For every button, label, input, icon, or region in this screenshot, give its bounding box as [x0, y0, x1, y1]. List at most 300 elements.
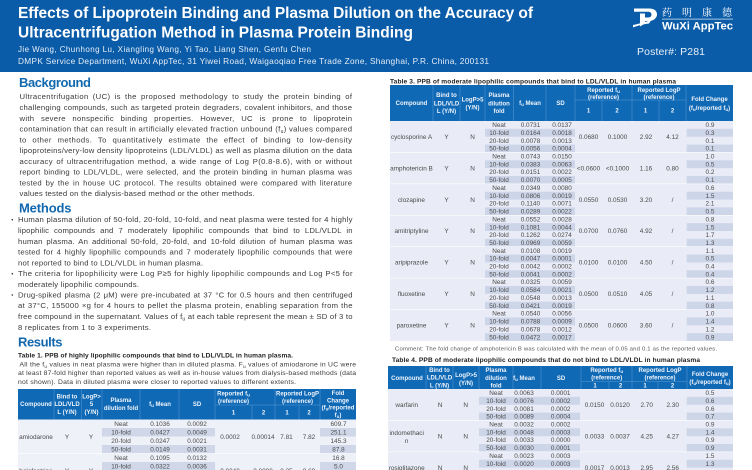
row group: aripiprazole: 0.0108	[521, 248, 541, 255]
row group: amphotericin B: amphotericin B	[390, 165, 433, 172]
row group: amitriptyline: /	[672, 228, 674, 235]
row group: warfarin: 10-fold	[486, 398, 506, 405]
row group: indomethacin: n	[405, 438, 409, 445]
table 4 title: Table 4. PPB of moderate lipophilic compounds that do not bind to LDL/VLDL in human plasma	[392, 357, 700, 364]
table 1 header: 1	[285, 411, 289, 417]
row group: rosiglitazone: 0.0023	[514, 453, 534, 460]
table 1 description: values in neat plasma were higher than in diluted plasma. F	[47, 362, 243, 368]
row group: amiodarone: 0.1036	[150, 421, 170, 428]
table 3 header: dilution	[488, 102, 510, 108]
table 1 header: 2	[262, 411, 266, 417]
row group: aripiprazole: 0.4	[706, 264, 715, 271]
table 3 header: 2	[615, 109, 619, 115]
row group: warfarin: 0.0150	[585, 402, 605, 409]
row group: halofantrine: Neat	[114, 455, 128, 462]
table 1 header: (reference)	[282, 399, 313, 405]
row group: indomethacin: 0.0030	[514, 445, 534, 452]
row group: indomethacin: 10-fold	[486, 429, 506, 436]
row group: fluoxetine: 0.6	[706, 279, 715, 286]
row group: clozapine: 20-fold	[489, 201, 509, 208]
table 1 header: 5	[90, 402, 94, 408]
row group: warfarin: 50-fold	[486, 414, 506, 421]
background paragraph: contamination that can result in artificially elevated fraction unbound (f	[20, 124, 280, 134]
row group: paroxetine: Y	[444, 322, 449, 329]
row group: cyclosporine A: 0.0137	[552, 122, 572, 129]
row group: amitriptyline: 10-fold	[489, 224, 509, 231]
icon: WuXi AppTec logo	[633, 4, 733, 32]
table 3	[390, 85, 733, 341]
row group: fluoxetine: fluoxetine	[398, 291, 426, 298]
row group: clozapine: 0.0080	[552, 185, 572, 192]
row group: amiodarone: Y	[65, 434, 70, 441]
row group: cyclosporine A: 0.1	[706, 146, 715, 153]
row group: fluoxetine: 0.8	[706, 303, 715, 310]
table 1 description: values of amiodarone in UC were	[246, 362, 356, 368]
row group: warfarin: 0.0089	[514, 414, 534, 421]
row group: warfarin: 0.0001	[551, 390, 571, 397]
table 4 header: LogP>5	[455, 373, 478, 379]
row group: aripiprazole: 0.0042	[521, 264, 541, 271]
table 1 header: LogP>	[82, 394, 101, 400]
row group: amphotericin B: 0.0383	[521, 161, 541, 168]
table 1 header: /reported	[328, 406, 355, 412]
table 4 header: dilution	[485, 376, 507, 382]
table 3 header: LogP>5	[462, 98, 484, 104]
row group: clozapine: N	[470, 197, 475, 204]
row group: cyclosporine A: 0.9	[706, 122, 715, 129]
row group: fluoxetine: 10-fold	[489, 287, 509, 294]
table 1 header: SD	[193, 402, 202, 408]
row group: halofantrine: 0.0132	[187, 455, 207, 462]
row group: clozapine	[390, 184, 733, 216]
row group: paroxetine: 0.0056	[552, 311, 572, 318]
row group: warfarin: 0.6	[706, 398, 715, 405]
row group: amiodarone: 7.81	[280, 434, 293, 441]
row group: amitriptyline: N	[470, 228, 475, 235]
table 3 header: (reference)	[643, 95, 675, 101]
row group: warfarin: 0.6	[706, 406, 715, 413]
row group: indomethacin: 0.0032	[514, 422, 534, 429]
row group: indomethacin: 0.0033	[585, 433, 605, 440]
poster number: Poster#: P281	[637, 46, 705, 58]
row group: cyclosporine A: 4.12	[666, 134, 679, 141]
row group: paroxetine: paroxetine	[397, 322, 427, 329]
row group: indomethacin: N	[438, 433, 443, 440]
table 4 header: L (Y/N)	[430, 384, 449, 390]
row group: amiodarone: 50-fold	[111, 446, 131, 454]
authors: Jie Wang, Chunhong Lu, Xiangling Wang, Yi Tao, Liang Shen, Genfu Chen	[18, 45, 311, 54]
table 1 header: u	[326, 407, 329, 412]
table 4 header: Bind to	[429, 368, 450, 374]
table 4 header: Reported f	[590, 368, 620, 374]
row group: amphotericin B: 20-fold	[489, 169, 509, 176]
table 1 header: (reference)	[218, 399, 249, 405]
row group: amphotericin B: 0.0005	[552, 177, 572, 184]
row group: warfarin: 0.0081	[514, 406, 534, 413]
row group: amitriptyline: 0.1081	[521, 224, 541, 231]
row group: paroxetine: 0.9	[706, 334, 715, 341]
row group: cyclosporine A: Neat	[492, 122, 506, 129]
row group: amitriptyline: 4.92	[640, 228, 653, 235]
table 4 header: )	[729, 380, 731, 386]
row group: paroxetine: 0.0600	[608, 322, 628, 329]
row group: indomethacin: 0.0048	[514, 429, 534, 436]
table 1 header: u	[247, 393, 250, 398]
row group: amitriptyline: 20-fold	[489, 232, 509, 239]
table 1 header: Fold	[332, 391, 345, 397]
affiliation: DMPK Service Department, WuXi AppTec, 31 Yiwei Road, Waigaoqiao Free Trade Zone, Shanghai, P.R. China, 200131	[18, 56, 489, 66]
row group: amitriptyline: 1.7	[706, 232, 715, 239]
row group: indomethacin: 0.0033	[514, 437, 534, 444]
row group: clozapine: 0.0019	[552, 193, 572, 200]
row group: paroxetine: 0.0012	[552, 326, 572, 333]
row group: indomethacin: 4.25	[640, 433, 653, 440]
table 3 header: 1	[587, 109, 591, 115]
table 3 header: /reported f	[696, 106, 726, 112]
table 1 header: f	[149, 402, 151, 408]
table 4 header: u	[515, 377, 518, 382]
row group: paroxetine: 0.0788	[521, 319, 541, 326]
row group: indomethacin: 0.0037	[610, 433, 630, 440]
table 3 header: u	[725, 107, 728, 112]
methods bullet list: 8 replicates from 1 to 3 experiments.	[18, 323, 151, 332]
table 3 header: L (Y/N)	[437, 109, 456, 115]
row group: clozapine: 0.0349	[521, 185, 541, 192]
row group: paroxetine: 20-fold	[489, 326, 509, 333]
row group: clozapine: 1.5	[706, 193, 715, 200]
row group: cyclosporine A: 2.92	[640, 134, 653, 141]
row group: aripiprazole	[390, 246, 733, 278]
row group: fluoxetine	[390, 278, 733, 310]
table 3 header: u	[617, 89, 620, 94]
row group: amphotericin B: Neat	[492, 154, 506, 161]
row group: paroxetine: 0.0017	[552, 334, 572, 341]
row group: cyclosporine A: 0.0164	[521, 130, 541, 137]
methods bullet list: u	[182, 317, 185, 323]
table 3 header: (f	[689, 106, 693, 112]
table 3 header: fold	[494, 109, 505, 115]
table 4 header: fold	[490, 384, 502, 390]
background paragraph: with severe nonspecific binding properties. However, UC is prone to lipoprotein	[18, 114, 352, 123]
row group: amitriptyline: 0.0028	[552, 216, 572, 223]
row group: fluoxetine: Neat	[492, 279, 506, 286]
row group: aripiprazole: 0.0100	[608, 260, 628, 267]
row group: amitriptyline: Neat	[492, 216, 506, 223]
background paragraph: to other methods. To quantitatively estimate the effect of binding to low-density	[20, 135, 352, 144]
row group: paroxetine: 0.0009	[552, 319, 572, 326]
row group: aripiprazole: 50-fold	[489, 271, 509, 278]
row group: cyclosporine A: Y	[444, 134, 449, 141]
poster title	[18, 5, 534, 42]
row group: amitriptyline: 1.5	[706, 224, 715, 231]
row group: cyclosporine A: 0.1000	[608, 134, 628, 141]
methods bullet list: moderately lipophilic compounds.	[18, 280, 139, 289]
table 3 header: u	[521, 102, 524, 107]
row group: clozapine: 0.0071	[552, 201, 572, 208]
row group: aripiprazole: 0.0019	[552, 248, 572, 255]
methods bullet list: tested for 4 highly lipophilic compounds and 7 moderately lipophilic compounds that were	[18, 248, 352, 256]
table 1 header: 2	[307, 411, 311, 417]
row group: amiodarone: 0.0092	[187, 421, 207, 428]
row group: amphotericin B: 10-fold	[489, 161, 509, 168]
row group: amphotericin B: <0.0600	[577, 165, 601, 172]
row group: halofantrine	[18, 453, 356, 470]
table 4 header: Compound	[391, 376, 423, 382]
row group: halofantrine: 0.1095	[150, 455, 170, 462]
row group: paroxetine: 50-fold	[489, 334, 509, 341]
row group: cyclosporine A: 10-fold	[489, 130, 509, 137]
table 4 header: Mean	[518, 376, 535, 382]
row group: paroxetine: N	[470, 322, 475, 329]
table 1 header: Bind to	[57, 394, 78, 400]
row group: amitriptyline: 0.0760	[608, 228, 628, 235]
row group: clozapine: /	[672, 197, 674, 204]
row group: warfarin: 0.0002	[551, 398, 571, 405]
row group: clozapine: Neat	[492, 185, 506, 192]
row group: warfarin: 2.70	[640, 402, 653, 409]
row group: indomethacin: 0.9	[706, 445, 715, 452]
background paragraph: lipoproteins/very-low density lipoproteins (LDL/VLDL) as well as plasma dilution on the data	[20, 146, 353, 155]
methods bullet list: free compound in the supernatant. Values of f	[18, 312, 182, 321]
methods bullet list: not reported to bind to LDL/VLDL in human plasma.	[18, 258, 203, 268]
row group: warfarin: 0.0002	[551, 406, 571, 413]
row group: aripiprazole: 0.0100	[579, 260, 599, 267]
row group: amphotericin B: 0.0063	[552, 161, 572, 168]
row group: paroxetine	[390, 309, 733, 341]
table 1 header: L (Y/N)	[57, 410, 77, 416]
methods bullet list: at each table represent the mean ± SD of 3 to	[185, 312, 352, 321]
row group: amphotericin B: 50-fold	[489, 177, 509, 184]
table 1 description	[18, 362, 356, 386]
row group: fluoxetine: 1.1	[706, 295, 715, 302]
row group: amitriptyline: 1.3	[706, 240, 715, 247]
row group: cyclosporine A: 0.0013	[552, 138, 572, 145]
row group: rosiglitazone: Neat	[489, 453, 503, 460]
table 4 header: LDL/VLD	[427, 376, 453, 382]
table 4 header: 1	[593, 384, 597, 390]
row group: clozapine: 3.20	[640, 197, 653, 204]
background paragraph: Ultracentrifugation (UC) is the proposed methodology to study the protein binding of	[20, 92, 353, 101]
row group: cyclosporine A: 0.1	[706, 138, 715, 145]
row group: amitriptyline: 0.0969	[521, 240, 541, 247]
row group: rosiglitazone: 0.0003	[551, 461, 571, 468]
table 4 header: u	[693, 381, 696, 386]
row group: aripiprazole: 0.0047	[521, 256, 541, 263]
row group: indomethacin: 0.0001	[551, 445, 571, 452]
table 4	[388, 366, 733, 470]
row group: indomethacin: 0.0000	[551, 437, 571, 444]
row group: warfarin: N	[463, 402, 468, 409]
row group: paroxetine: 0.0500	[579, 322, 599, 329]
row group: fluoxetine: 0.0021	[552, 287, 572, 294]
row group: aripiprazole: Y	[444, 260, 449, 267]
row group: fluoxetine: 0.0510	[608, 291, 628, 298]
row group: paroxetine: Neat	[492, 311, 506, 318]
row group: aripiprazole: /	[672, 260, 674, 267]
table 3 header: 2	[671, 109, 675, 115]
table 3 header: Reported f	[587, 88, 617, 94]
row group: fluoxetine: 0.0421	[521, 303, 541, 310]
row group: clozapine: 0.6	[706, 185, 715, 192]
row group: fluoxetine: 0.0013	[552, 295, 572, 302]
row group: clozapine: 50-fold	[489, 209, 509, 216]
row group: indomethacin: indomethaci	[389, 430, 424, 437]
row group: paroxetine: 3.60	[640, 322, 653, 329]
table 1 header: (Y/N)	[84, 410, 98, 416]
table 3 header: (reference)	[588, 95, 619, 101]
table 1 header: Change	[327, 399, 350, 405]
table 1 header: u	[151, 403, 154, 408]
table 3 header	[390, 85, 733, 121]
row group: amiodarone: 145.3	[330, 438, 347, 445]
row group: indomethacin: 4.27	[666, 433, 679, 440]
table 3 header: (Y/N)	[466, 106, 480, 112]
row group: warfarin: Neat	[489, 390, 503, 397]
icon: WuXi AppTec logo: 药	[662, 4, 672, 19]
row group: fluoxetine: 20-fold	[489, 295, 509, 302]
row group: rosiglitazone: 1.5	[706, 453, 715, 460]
row group: warfarin: 0.0063	[514, 390, 534, 397]
table 4 header	[388, 366, 733, 390]
row group: amphotericin B: 0.0151	[521, 169, 541, 176]
row group: amiodarone: 0.0247	[150, 438, 170, 445]
background paragraph: ) values compared	[284, 124, 352, 134]
table 3 header: u	[693, 107, 696, 112]
row group: fluoxetine: 4.05	[640, 291, 653, 298]
table 1 header: Reported f	[217, 392, 247, 398]
icon: WuXi AppTec logo: 康	[702, 4, 712, 19]
row group: clozapine: 0.0550	[579, 197, 599, 204]
row group: fluoxetine: 0.0019	[552, 303, 572, 310]
row group: warfarin: 0.0004	[551, 414, 571, 421]
table 1 header	[18, 389, 356, 420]
row group: amiodarone	[19, 421, 356, 454]
table 4 header: (reference)	[591, 375, 622, 381]
table 3 comment: Comment: The fold change of amphotericin B was calculated with the mean of 0.05 and 0.1 as the reported values.	[395, 346, 717, 352]
row group: warfarin: warfarin	[394, 402, 419, 409]
table 3 header: LDL/VLD	[434, 102, 460, 108]
table 3 header: 1	[644, 109, 648, 115]
header banner	[0, 0, 752, 72]
row group: amiodarone: 0.0021	[187, 438, 207, 445]
row group: aripiprazole: N	[470, 260, 475, 267]
methods bullet list	[12, 215, 353, 332]
methods bullet list: Human plasma dilution of 50-fold, 20-fold, 10-fold, and neat plasma were tested for 4 highly	[18, 215, 353, 224]
row group: cyclosporine A: 0.0078	[521, 138, 541, 145]
table 3 header: Fold Change	[691, 97, 728, 103]
row group: rosiglitazone	[388, 452, 733, 470]
background paragraph	[18, 92, 353, 198]
row group: aripiprazole: 0.5	[706, 256, 715, 263]
table 1 header: f	[335, 413, 337, 419]
table 1 description: at least 87-fold higher than reported values as well as in-house values from dialysis-based methods (data	[18, 370, 356, 377]
table 1 description: not shown). Data in diluted plasma were closer to reported values to different extents.	[18, 379, 296, 386]
table 1 header: dilution fold	[104, 406, 138, 412]
row group: amphotericin B	[390, 152, 733, 184]
row group: warfarin: N	[438, 402, 443, 409]
row group: cyclosporine A: 0.0004	[552, 146, 572, 153]
row group: clozapine: 0.1140	[521, 201, 540, 208]
table 4 header: (Y/N)	[459, 381, 473, 387]
row group: amitriptyline: amitriptyline	[394, 228, 429, 235]
row group: amphotericin B: 1.16	[640, 165, 653, 172]
row group: fluoxetine: 50-fold	[489, 303, 509, 310]
row group: indomethacin: 50-fold	[486, 445, 506, 452]
row group: cyclosporine A: 50-fold	[489, 146, 509, 153]
row group: warfarin	[394, 390, 733, 421]
row group: rosiglitazone: 0.0020	[514, 461, 534, 468]
table 1 title: Table 1. PPB of highly lipophilic compounds that bind to LDL/VLDL in human plasma.	[18, 352, 293, 360]
background paragraph: accuracy of ultracentrifugation method, a wide range of Log P(0.8-8.6), with or without	[20, 157, 353, 166]
table 4 header: 2	[671, 384, 675, 390]
row group: fluoxetine: /	[672, 291, 674, 298]
row group: amitriptyline: 0.0044	[552, 224, 572, 231]
row group: aripiprazole: 0.4	[706, 271, 715, 278]
row group: indomethacin: Neat	[489, 422, 503, 429]
row group: cyclosporine A: N	[470, 134, 475, 141]
row group: paroxetine: /	[672, 322, 674, 329]
table 4 header: 1	[643, 384, 647, 390]
table 1 description: u	[243, 365, 246, 370]
table 3 header: f	[519, 101, 521, 107]
table 4 header: Plasma	[485, 368, 507, 374]
background paragraph: tested by the in house UC protocol. The results obtained were compared with literature	[20, 178, 352, 187]
table 3 header: Mean	[524, 101, 541, 107]
row group: amiodarone: 0.0427	[150, 430, 170, 436]
table 4 header: (reference)	[644, 375, 676, 381]
row group: amiodarone: 0.0002	[220, 434, 240, 441]
row group: amiodarone: 0.0049	[187, 430, 207, 436]
row group: amiodarone: 0.0031	[187, 446, 207, 454]
table 4 header: f	[513, 376, 515, 382]
row group: aripiprazole: 0.0002	[552, 271, 572, 278]
table 4 header: /reported f	[696, 380, 727, 386]
table 1 header: Reported LogP	[276, 392, 319, 398]
row group: cyclosporine A: 20-fold	[489, 138, 509, 145]
table 4 body background	[388, 389, 733, 470]
table 3 header: Compound	[396, 101, 428, 107]
row group: clozapine: 0.0022	[552, 209, 572, 216]
heading: Methods: Methods	[19, 200, 72, 216]
row group: paroxetine: 10-fold	[489, 319, 509, 326]
table 1 description: u	[44, 365, 47, 370]
row group: paroxetine: 1.0	[706, 311, 715, 318]
row group: fluoxetine: N	[470, 291, 475, 298]
row group: rosiglitazone: 10-fold	[486, 461, 506, 468]
row group: fluoxetine: 0.0059	[552, 279, 572, 286]
table 4 header: u	[620, 369, 623, 374]
methods bullet list: at 37°C, 155000 ×g for 4 hours to pellet the plasma protein, enabling separation from the	[18, 301, 352, 310]
table 3 body background	[390, 121, 733, 341]
row group: amitriptyline	[390, 215, 733, 247]
row group: paroxetine: 0.0472	[521, 334, 541, 341]
row group: halofantrine: 16.8	[332, 455, 345, 462]
methods bullet list: lipophilic compounds and 7 moderately lipophilic compounds that bind to LDL/VLDL in	[18, 226, 352, 235]
table 1 description: All the f	[20, 362, 44, 368]
row group: amphotericin B: Y	[444, 165, 449, 172]
row group: amiodarone: 87.8	[332, 446, 345, 454]
row group: fluoxetine: 0.0548	[521, 295, 541, 302]
row group: warfarin: 0.0076	[514, 398, 534, 405]
row group: aripiprazole: 0.0041	[521, 271, 541, 278]
row group: amphotericin B: 0.2	[706, 169, 715, 176]
row group: amiodarone: 251.1	[330, 430, 347, 436]
row group: amitriptyline: 0.0552	[521, 216, 541, 223]
background paragraph: challenging compounds, such as targeted protein degraders, covalent inhibitors, and those	[20, 103, 352, 112]
background paragraph: u	[281, 129, 284, 135]
row group: amphotericin B: 0.5	[706, 161, 715, 168]
row group: amitriptyline: Y	[444, 228, 449, 235]
